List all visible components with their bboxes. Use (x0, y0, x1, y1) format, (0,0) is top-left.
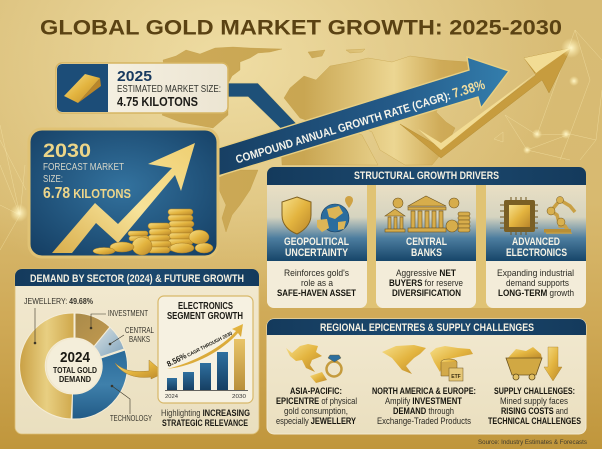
panel heading: DEMAND BY SECTOR (2024) & FUTURE GROWTH (30, 273, 244, 285)
donut leader lines (34, 308, 130, 414)
bar chart (165, 339, 248, 400)
column: supply challenges: Mined supply faces (500, 396, 568, 406)
bar chart: 2024 (165, 394, 178, 400)
donut labels: TECHNOLOGY (110, 414, 152, 423)
card: 2030 (29, 129, 218, 257)
column: supply challenges: SUPPLY CHALLENGES: (494, 386, 575, 396)
card: central banks: BUYERS for reserve (389, 278, 463, 288)
card: central banks: BANKS (411, 247, 442, 259)
card: 2025: ESTIMATED MARKET SIZE: (117, 84, 221, 95)
card: 2030: 6.78 KILOTONS (43, 185, 131, 202)
card: 2025 (56, 63, 228, 113)
column: supply challenges: RISING COSTS and (501, 406, 568, 416)
donut labels (24, 297, 154, 423)
panel heading: REGIONAL EPICENTRES & SUPPLY CHALLENGES (320, 322, 534, 334)
column: supply challenges (488, 347, 581, 426)
card: advanced electronics: demand supports (506, 278, 569, 288)
column: asia-pacific: ASIA-PACIFIC: (290, 386, 342, 396)
donut centre text: TOTAL GOLD (53, 365, 97, 375)
card: electronics segment growth: ELECTRONICS (178, 301, 233, 312)
card: advanced electronics: ELECTRONICS (506, 247, 567, 259)
strategic relevance text: STRATEGIC RELEVANCE (162, 418, 248, 428)
icon: rising arrow (52, 143, 195, 253)
card: central banks: CENTRAL (406, 236, 447, 248)
card: geopolitical uncertainty: Reinforces gold's (284, 268, 349, 278)
CAGR label: 8.56% CAGR THROUGH 2030 (165, 328, 234, 369)
donut centre text: DEMAND (59, 374, 91, 384)
donut labels: BANKS (129, 335, 150, 344)
icon: asia map and ring (286, 344, 342, 383)
card: advanced electronics: Expanding industrial (497, 268, 574, 278)
2030 text: 2030 (43, 141, 91, 162)
card: electronics segment growth: SEGMENT GROWTH (167, 311, 243, 322)
source note: Source: Industry Estimates & Forecasts (478, 439, 588, 446)
CAGR label: COMPOUND ANNUAL GROWTH RATE (CAGR): 7.38% (234, 77, 487, 166)
panel: demand by sector (15, 269, 259, 434)
card: central banks: Aggressive NET (396, 268, 456, 278)
card: advanced electronics (486, 185, 586, 308)
strategic relevance text: Highlighting INCREASING (161, 408, 250, 418)
card: electronics segment growth (158, 296, 253, 403)
card: central banks (376, 185, 476, 308)
gold growth arrow (400, 38, 581, 158)
card: geopolitical uncertainty: UNCERTAINTY (285, 247, 349, 259)
card: advanced electronics: ADVANCED (512, 236, 560, 248)
card: geopolitical uncertainty: role as a (301, 278, 334, 288)
column: north america and europe: DEMAND through (393, 406, 454, 416)
icon: world map and ETF coins: ETF (451, 374, 461, 380)
card: 2025: 4.75 KILOTONS (117, 94, 198, 109)
arrow: technology to electronics (115, 360, 164, 379)
card: 2030: SIZE: (43, 174, 63, 185)
column: north america and europe: Exchange-Traded Products (377, 416, 471, 426)
bar chart: 2030 (232, 394, 246, 400)
strategic relevance text (161, 408, 250, 428)
column: asia-pacific: gold consumption, (284, 406, 348, 416)
card: geopolitical uncertainty: GEOPOLITICAL (284, 236, 349, 248)
icon: coin stacks (93, 209, 213, 255)
world map backdrop (162, 47, 478, 232)
panel heading (15, 269, 259, 286)
column: asia-pacific (276, 344, 357, 426)
donut centre text: 2024 (60, 349, 91, 366)
card: 2030: FORECAST MARKET (43, 162, 124, 173)
panel heading (267, 167, 586, 185)
icon: chip and robot arm (500, 196, 575, 235)
card: geopolitical uncertainty: SAFE-HAVEN ASSET (277, 288, 356, 298)
panel: structural growth drivers (267, 167, 586, 308)
column: north america and europe: Amplify INVESTMENT (385, 396, 462, 406)
donut labels: JEWELLERY: 49.68% (24, 297, 94, 306)
column: north america and europe: NORTH AMERICA & EUROPE: (372, 386, 476, 396)
panel heading (267, 319, 586, 335)
icon: mine cart and down arrow (506, 347, 562, 381)
icon: bank and coins (385, 196, 470, 232)
donut chart (20, 313, 127, 419)
panel heading: STRUCTURAL GROWTH DRIVERS (354, 170, 499, 182)
panel: regional epicentres and supply challenges (267, 319, 586, 434)
card: geopolitical uncertainty (267, 185, 367, 308)
donut labels: CENTRAL (125, 326, 154, 335)
donut centre text (53, 349, 97, 384)
card: advanced electronics: LONG-TERM growth (498, 288, 574, 298)
2025 text: 2025 (117, 68, 152, 85)
column: north america and europe (372, 345, 476, 426)
title: GLOBAL GOLD MARKET GROWTH: 2025-2030 (40, 16, 562, 40)
CAGR ribbon arrow (218, 57, 509, 176)
column: asia-pacific: especially JEWELLERY (276, 416, 357, 426)
icon: shield and globe (282, 196, 353, 234)
growth curve arrow (167, 324, 243, 369)
network lines decoration (0, 30, 602, 250)
donut labels: INVESTMENT (108, 309, 148, 318)
icon: gold bar (64, 74, 101, 103)
connector ribbon from 2025 (226, 83, 297, 130)
network sparkles (10, 76, 579, 222)
card: central banks: DIVERSIFICATION (392, 288, 461, 298)
column: asia-pacific: EPICENTRE of physical (276, 396, 357, 406)
